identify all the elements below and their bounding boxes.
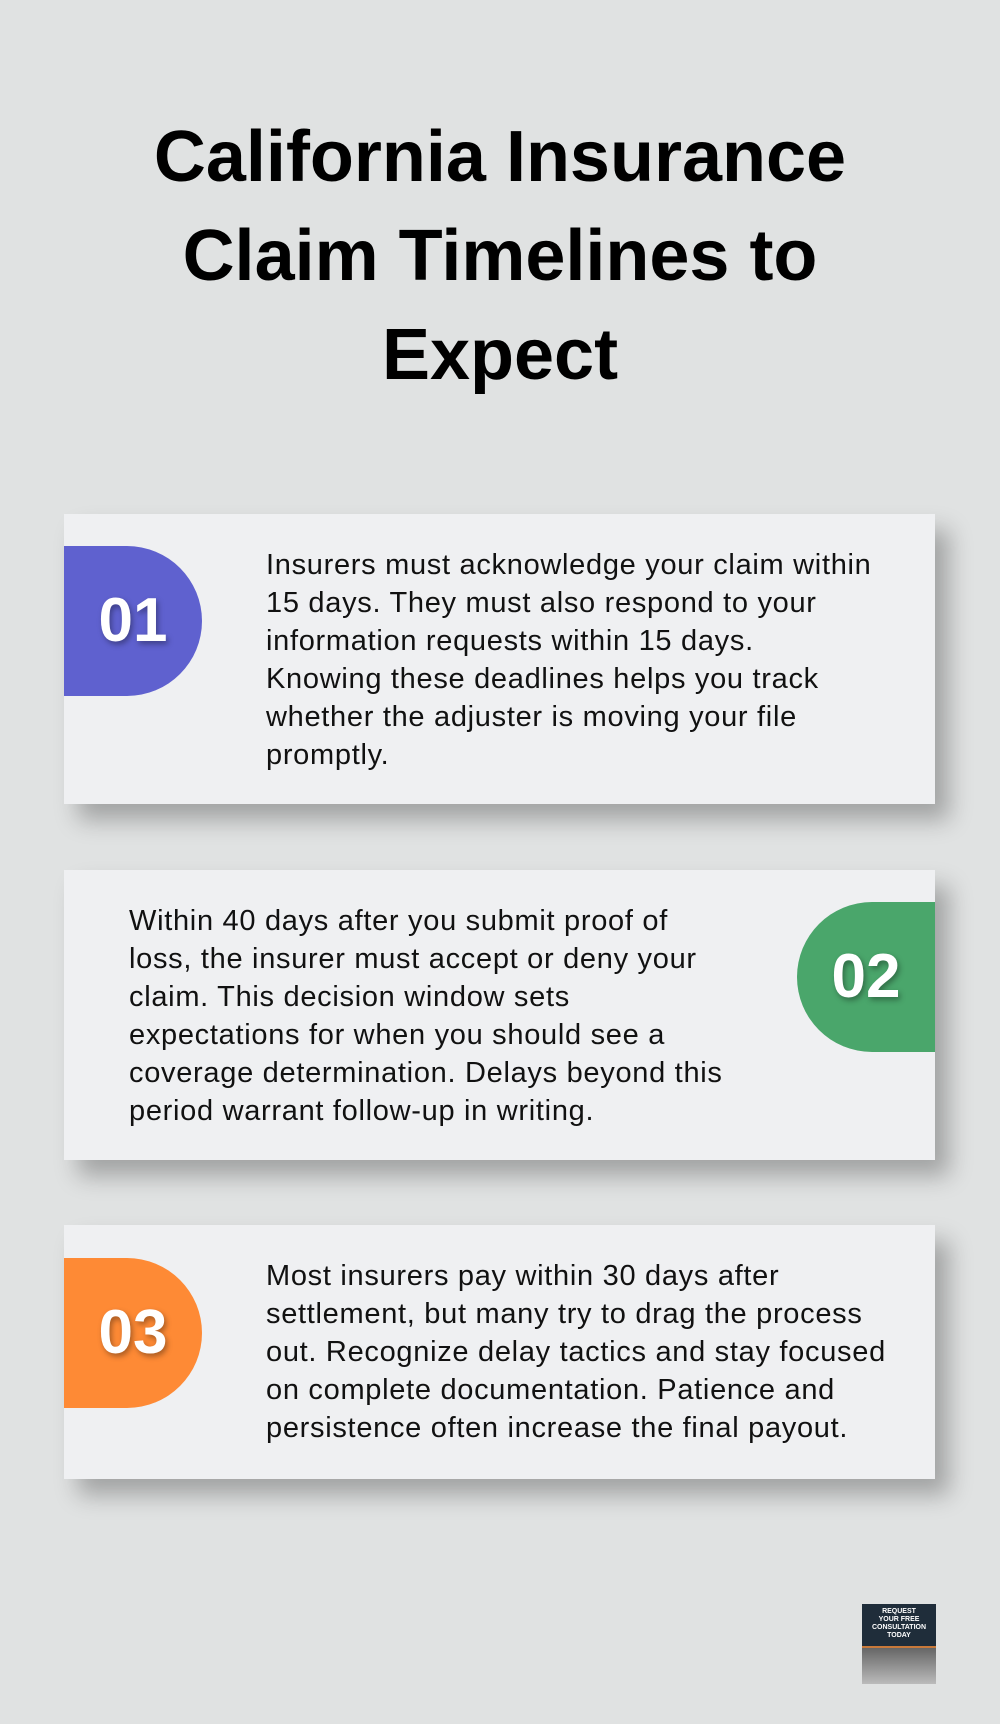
text 03: persistence often increase the final payout.	[266, 1412, 848, 1444]
text 01: Knowing these deadlines helps you track	[266, 663, 819, 695]
title: Claim Timelines to	[183, 216, 817, 296]
text 02	[129, 905, 723, 1127]
text 01: promptly.	[266, 739, 389, 771]
panel: step 03	[64, 1225, 935, 1479]
text 01: whether the adjuster is moving your file	[266, 701, 797, 733]
text 01	[266, 549, 872, 771]
text 03: on complete documentation. Patience and	[266, 1374, 835, 1406]
badge 01: 01	[99, 586, 167, 655]
text 03: out. Recognize delay tactics and stay focused	[266, 1336, 886, 1368]
text 02: period warrant follow-up in writing.	[129, 1095, 594, 1127]
text 02: claim. This decision window sets	[129, 981, 570, 1013]
text 03: settlement, but many try to drag the process	[266, 1298, 863, 1330]
badge 01	[64, 546, 202, 696]
logo: consultation badge	[862, 1604, 936, 1684]
text 02: loss, the insurer must accept or deny your	[129, 943, 697, 975]
logo: consultation badge: REQUEST	[882, 1608, 916, 1615]
title: Expect	[382, 315, 618, 395]
text 01: Insurers must acknowledge your claim within	[266, 549, 872, 581]
text 03: Most insurers pay within 30 days after	[266, 1260, 779, 1292]
panel: step 01	[64, 514, 935, 804]
text 02: coverage determination. Delays beyond this	[129, 1057, 723, 1089]
logo: consultation badge: TODAY	[887, 1632, 911, 1639]
text 02: expectations for when you should see a	[129, 1019, 665, 1051]
badge 02	[797, 902, 935, 1052]
panel: step 02	[64, 870, 935, 1160]
text 02: Within 40 days after you submit proof of	[129, 905, 668, 937]
badge 02: 02	[832, 942, 900, 1011]
logo: consultation badge: CONSULTATION	[872, 1624, 926, 1631]
title	[154, 117, 846, 395]
badge 03	[64, 1258, 202, 1408]
text 01: information requests within 15 days.	[266, 625, 754, 657]
title: California Insurance	[154, 117, 846, 197]
logo: consultation badge: YOUR FREE	[879, 1616, 919, 1623]
badge 03: 03	[99, 1298, 167, 1367]
text 03	[266, 1260, 886, 1444]
text 01: 15 days. They must also respond to your	[266, 587, 817, 619]
